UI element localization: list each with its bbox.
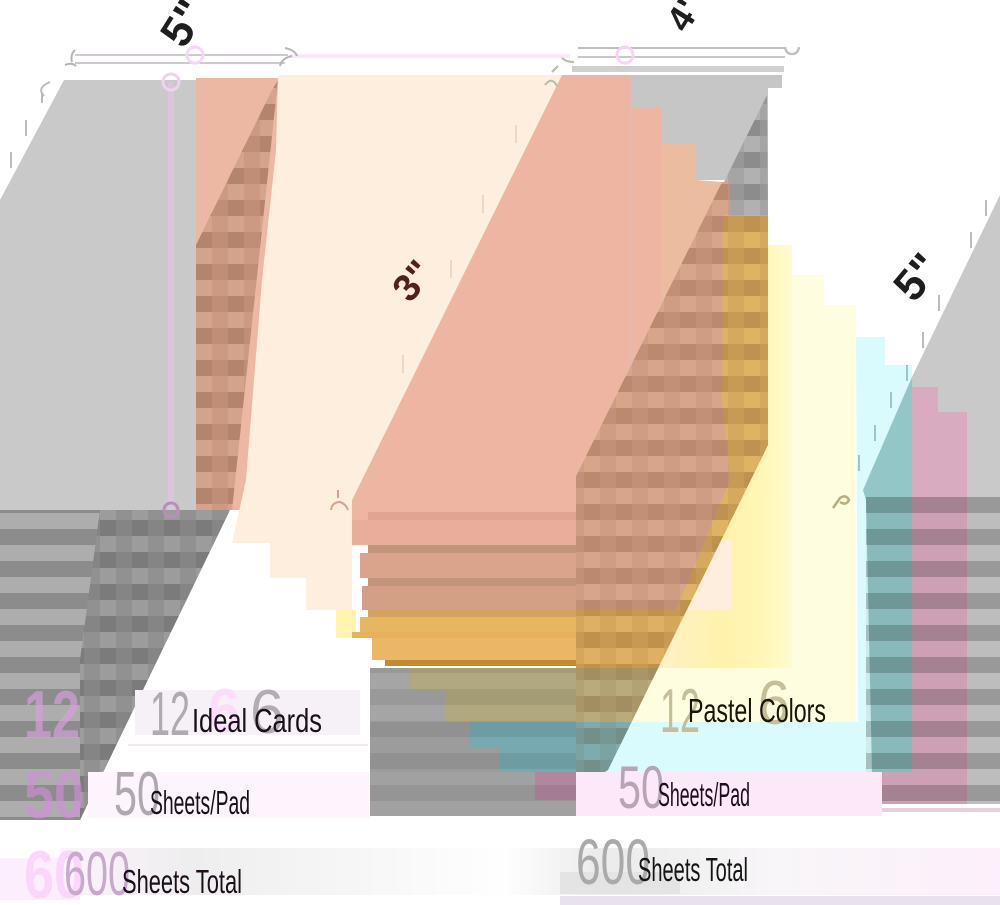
label: center size: 3"	[385, 253, 442, 310]
panel: right stripe bands	[866, 497, 1000, 812]
text: sheets total right: Sheets Total	[638, 851, 748, 888]
number 12 left: 12	[150, 680, 190, 749]
panel: right checkered band	[570, 180, 770, 802]
label: right size: 5"	[884, 244, 951, 310]
row: total left	[0, 837, 500, 905]
row: pad right	[576, 754, 882, 821]
number 6 left: 6	[250, 678, 284, 747]
big number 12 left: 12	[24, 677, 80, 753]
big number 6 left: 6	[208, 677, 240, 746]
panel: yellow sheets	[336, 245, 856, 722]
panel: left gray sheet	[0, 80, 230, 820]
text: sheets pad left: Sheets/Pad	[150, 784, 250, 821]
panel: cyan sheet	[596, 337, 912, 772]
panel: main salmon sheet	[352, 75, 722, 545]
panel: right gray top sheet	[572, 66, 784, 245]
panel: pink sheet	[880, 387, 967, 804]
big number 50 left: 50	[24, 757, 84, 833]
text: sheets pad right: Sheets/Pad	[658, 776, 750, 813]
row: cards left	[24, 677, 368, 753]
dimension: top right bracket	[545, 47, 799, 86]
marker: center arc	[331, 490, 348, 510]
panel: teal sheet	[863, 377, 912, 772]
dimension: left vertical line	[163, 74, 179, 517]
text: pastel colors: Pastel Colors	[688, 692, 826, 729]
panel: right gray sheet	[912, 195, 1000, 500]
text: sheets total left: Sheets Total	[122, 863, 242, 900]
row: colors right	[660, 669, 826, 746]
number 50 left: 50	[114, 760, 160, 829]
number 50 right: 50	[618, 754, 664, 821]
marker: right arc	[833, 496, 849, 508]
number 600 right: 600	[576, 826, 650, 898]
row: total right	[500, 826, 1000, 905]
row: pad left	[24, 757, 370, 833]
dimension: top left bracket	[41, 47, 570, 103]
panel: cream sheet	[232, 75, 562, 610]
panel: stacked sheet edges	[352, 512, 576, 816]
dimension: side ticks	[10, 120, 987, 471]
number 12 right: 12	[660, 677, 700, 746]
panel: salmon left strip	[196, 78, 280, 510]
number 6 right: 6	[758, 669, 790, 738]
text: ideal cards: Ideal Cards	[192, 702, 322, 739]
